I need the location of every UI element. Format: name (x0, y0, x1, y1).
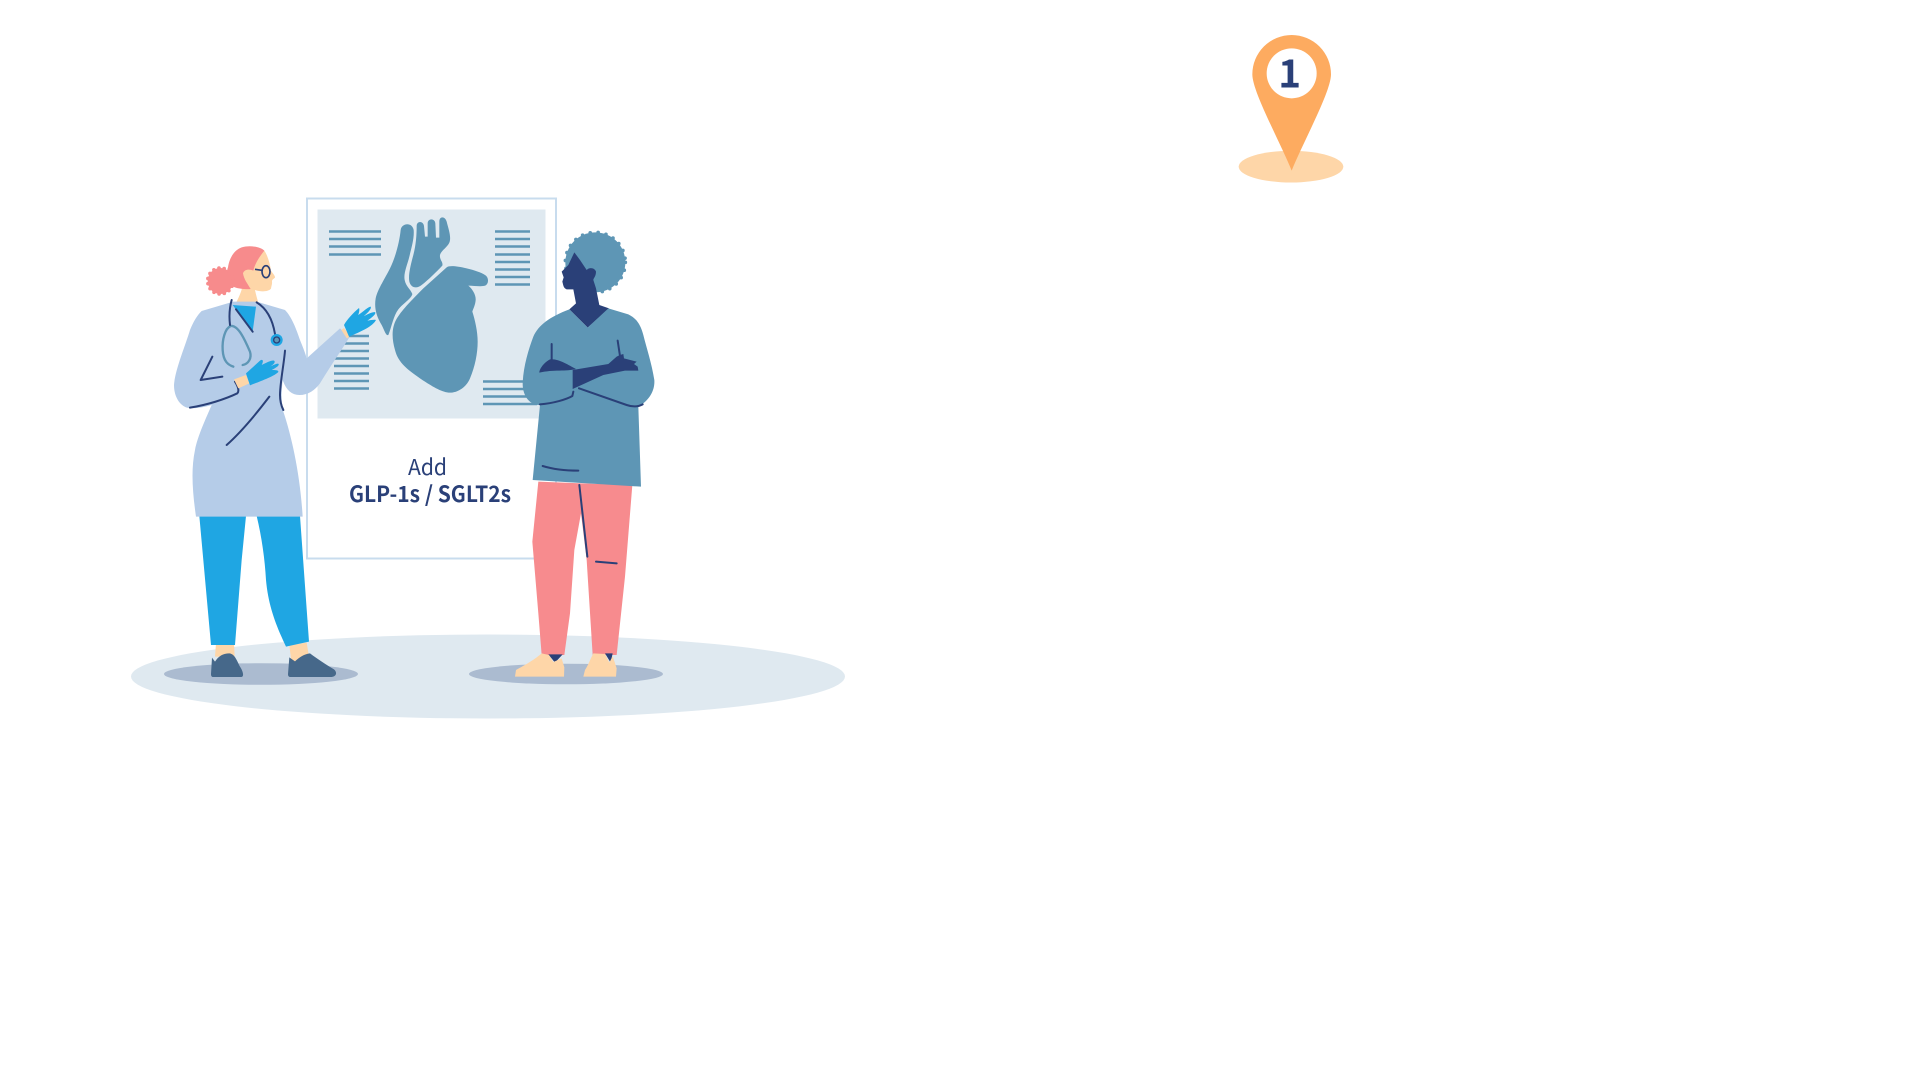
lower wrist (234, 375, 249, 388)
patient shadow (469, 664, 663, 684)
pin body (1252, 35, 1331, 171)
patient legs and feet (515, 482, 632, 677)
ground shadow (131, 634, 845, 718)
trousers (199, 516, 309, 647)
socks (548, 653, 613, 663)
patient upper body (523, 232, 654, 487)
text lines lower left (334, 336, 369, 388)
icon: heart (375, 217, 488, 393)
poster caption (349, 450, 511, 509)
lower glove (246, 360, 279, 385)
hair (208, 246, 264, 294)
trouser seams (579, 485, 617, 563)
feet (515, 653, 617, 677)
glasses (255, 266, 270, 278)
left hand (539, 359, 576, 373)
stethoscope chestpiece (271, 334, 283, 346)
face and neck (562, 252, 609, 328)
stethoscope straps and coat lines (190, 300, 285, 445)
doctor upper body (174, 246, 376, 517)
stethoscope tubing (223, 326, 251, 367)
shirt fold lines (540, 341, 643, 471)
patient figure (515, 232, 654, 677)
pin shadow (1239, 151, 1343, 182)
scrub top (233, 305, 256, 332)
shoes (211, 653, 336, 677)
caption line: Add: Add (408, 450, 447, 482)
crossed forearm (573, 354, 638, 389)
shirt (523, 308, 654, 487)
doctor figure (174, 246, 376, 677)
trousers (532, 482, 632, 655)
panel background (318, 210, 546, 418)
map pin marker (1239, 35, 1343, 182)
feet (215, 643, 309, 663)
text lines lower right (483, 382, 537, 404)
poster frame (307, 198, 556, 558)
coat (174, 302, 349, 517)
hair (565, 232, 625, 292)
text lines top left (329, 232, 381, 254)
doctor shadow (164, 663, 358, 685)
upper wrist (341, 328, 350, 339)
upper glove (344, 307, 376, 337)
pin number: 1 (1278, 43, 1301, 99)
pin centre (1267, 48, 1317, 98)
neck and face (235, 251, 275, 305)
poster panel with heart chart (318, 210, 546, 418)
text lines top right (495, 232, 530, 284)
caption line: GLP-1s / SGLT2s: GLP-1s / SGLT2s (349, 477, 511, 509)
doctor legs and shoes (199, 516, 336, 677)
